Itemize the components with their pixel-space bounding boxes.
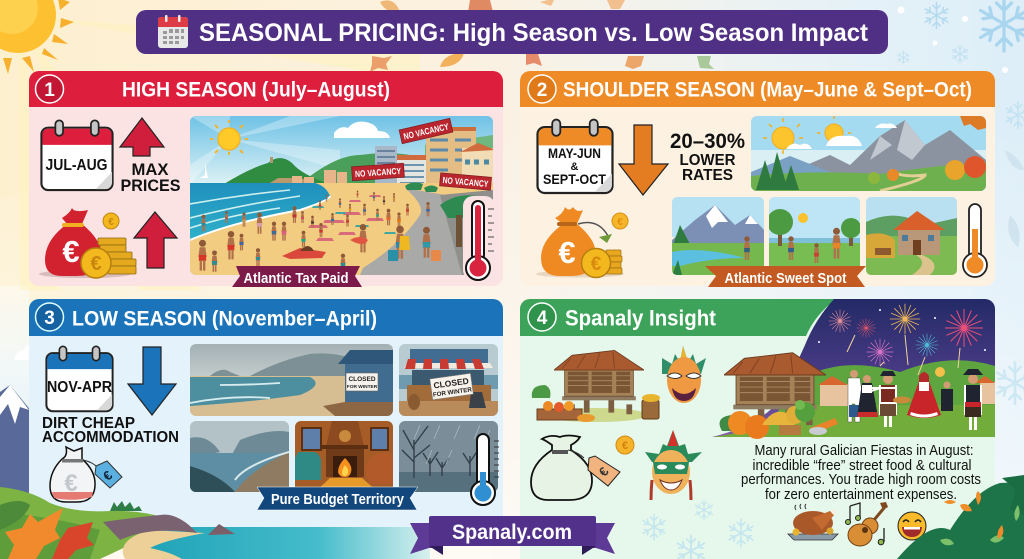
illustration: crowded beach bbox=[190, 116, 496, 275]
text block: insight: performances. You trade high room costs bbox=[741, 472, 981, 488]
calendar: JUL-AUG: JUL-AUG bbox=[46, 157, 108, 174]
panel 4 header: 4 bbox=[537, 308, 548, 329]
sign: no vacancy 1: NO VACANCY bbox=[403, 121, 450, 142]
calendar: May-Jun & Sept-Oct bbox=[538, 120, 612, 193]
illustration: festival horreo bbox=[724, 353, 826, 425]
panel 4 header: Spanaly Insight bbox=[565, 306, 717, 330]
calendar: NOV-APR: NOV-APR bbox=[47, 379, 112, 396]
illustration: misty coast bbox=[190, 421, 289, 492]
illustration: country house bbox=[866, 197, 957, 275]
icon: empty money bag with tag bbox=[50, 447, 122, 502]
icon: green carnival mask bbox=[645, 430, 702, 500]
foreground coast: hill, rocks, sand bbox=[0, 487, 235, 559]
sign: closed for winter stall: FOR WINTER bbox=[433, 386, 473, 399]
label: dirt cheap accommodation: ACCOMMODATION bbox=[42, 429, 179, 446]
icon: red money bag with coins: € bbox=[108, 217, 114, 228]
label: max prices bbox=[120, 160, 180, 195]
arrow down: blue bbox=[128, 347, 176, 415]
label: max prices: MAX bbox=[132, 160, 169, 179]
logo ribbon: Spanaly.com: Spanaly.com bbox=[452, 521, 572, 544]
icon: orange money bag: € bbox=[558, 235, 576, 270]
sign: closed for winter bbox=[346, 373, 378, 391]
sign: closed for winter: FOR WINTER bbox=[347, 384, 378, 390]
banner: Pure Budget Territory: Pure Budget Territory bbox=[271, 491, 405, 508]
icon: red money bag with coins: € bbox=[90, 253, 102, 275]
illustration: fireworks night sky and festival bbox=[712, 299, 995, 437]
calendar: May-Jun & Sept-Oct: & bbox=[571, 161, 579, 173]
panel 1 header bbox=[29, 71, 503, 107]
icon: orange money bag bbox=[536, 207, 628, 278]
foliage bottom-right bbox=[897, 475, 1024, 559]
text block: insight: incredible “free” street food & cultural bbox=[752, 458, 972, 474]
bottom-left mountain and sea bbox=[0, 385, 430, 559]
autumn leaves around title bbox=[370, 0, 714, 72]
icon: guitar and music notes bbox=[846, 502, 888, 546]
snowflakes panel 4 bbox=[643, 500, 753, 559]
sign: no vacancy 3: NO VACANCY bbox=[442, 175, 489, 189]
panel 2: shoulder season bbox=[520, 71, 995, 287]
label: dirt cheap accommodation: DIRT CHEAP bbox=[42, 415, 135, 432]
panel 3 header: LOW SEASON (November–April) bbox=[72, 306, 377, 330]
panel 4 header bbox=[520, 299, 836, 336]
banner: Atlantic Sweet Spot: Atlantic Sweet Spot bbox=[724, 270, 846, 287]
icon: gold coin: € bbox=[622, 440, 628, 452]
illustration: horreo with vegetables bbox=[532, 350, 660, 422]
panel 4: Spanaly insight bbox=[520, 299, 1024, 559]
illustration: family on meadow bbox=[769, 197, 860, 266]
illustration: fireplace room bbox=[295, 421, 393, 492]
fireworks bbox=[818, 304, 986, 375]
arrow down bbox=[619, 125, 668, 195]
title bar bbox=[136, 10, 888, 54]
panel 3: low season bbox=[29, 299, 503, 527]
label: max prices: PRICES bbox=[120, 176, 180, 195]
label: lower rates bbox=[670, 130, 745, 184]
panel 1 header: 1 bbox=[44, 80, 55, 101]
icon: roast turkey bbox=[788, 504, 838, 540]
text block: insight: for zero entertainment expenses. bbox=[765, 487, 957, 503]
panel 2 header: SHOULDER SEASON (May–June & Sept–Oct) bbox=[563, 78, 972, 102]
logo ribbon: Spanaly.com bbox=[410, 516, 615, 555]
icon: red money bag with coins bbox=[39, 208, 136, 278]
illustration: mountains and autumn valley bbox=[751, 116, 986, 191]
icon: carnival mask bbox=[662, 346, 706, 403]
sun top-left bbox=[0, 0, 420, 290]
panel 1 header: HIGH SEASON (July–August) bbox=[122, 78, 390, 102]
calendar: NOV-APR bbox=[46, 346, 113, 411]
calendar: May-Jun & Sept-Oct: MAY-JUN bbox=[548, 145, 601, 161]
snowflakes top-right bbox=[898, 0, 1024, 404]
illustration: river hiking bbox=[672, 197, 764, 275]
panel 2 header bbox=[520, 71, 995, 107]
label: dirt cheap accommodation bbox=[42, 415, 179, 446]
illustration: rainy beach with closed hut bbox=[190, 344, 395, 416]
festival dancers bbox=[848, 367, 983, 430]
icon: empty green money bag with tag bbox=[531, 436, 620, 500]
sign: closed for winter: CLOSED bbox=[348, 376, 376, 383]
icon: empty green money bag with tag: € bbox=[596, 464, 612, 479]
beach sun bbox=[210, 120, 248, 155]
icon: orange money bag: € bbox=[617, 217, 623, 228]
text block: insight: Many rural Galician Fiestas in August: bbox=[754, 443, 974, 459]
sign: no vacancy 3 bbox=[440, 173, 492, 190]
title text: SEASONAL PRICING: High Season vs. Low Season Impact bbox=[199, 19, 869, 47]
banner: Atlantic Tax Paid: Atlantic Tax Paid bbox=[244, 270, 348, 287]
label: lower rates: 20–30% bbox=[670, 130, 745, 153]
icon: calendar bbox=[158, 15, 188, 48]
banner: Pure Budget Territory bbox=[257, 487, 418, 510]
icon: orange money bag: € bbox=[591, 254, 602, 275]
icon: empty money bag with tag: € bbox=[64, 470, 78, 497]
icon: empty money bag with tag: € bbox=[100, 468, 115, 484]
calendar: JUL-AUG bbox=[41, 120, 113, 190]
panel 3 header bbox=[29, 299, 503, 336]
sign: no vacancy 2: NO VACANCY bbox=[355, 166, 401, 179]
panel 1: high season bbox=[29, 71, 503, 287]
thermometer: hot bbox=[463, 196, 495, 280]
illustration: closed beach stall bbox=[399, 344, 498, 416]
sign: closed for winter stall: CLOSED bbox=[433, 376, 469, 391]
label: lower rates: RATES bbox=[682, 167, 733, 184]
icon: gold coin bbox=[616, 436, 634, 454]
thermometer: mild bbox=[963, 204, 987, 277]
foreground autumn leaves bottom-left bbox=[0, 501, 94, 559]
arrow up: max prices bbox=[120, 118, 164, 156]
sign: no vacancy 2 bbox=[352, 163, 404, 181]
panel 2 header: 2 bbox=[537, 80, 547, 101]
label: lower rates: LOWER bbox=[680, 152, 736, 169]
illustration: rainy trees bbox=[399, 421, 498, 492]
thermometer: cold bbox=[471, 434, 499, 505]
arrow up: bag bbox=[134, 212, 177, 268]
text block: insight bbox=[741, 443, 981, 503]
icon: smiling face bbox=[898, 512, 926, 540]
calendar: May-Jun & Sept-Oct: SEPT-OCT bbox=[543, 171, 606, 187]
icon: red money bag with coins: € bbox=[62, 234, 80, 269]
illustration: harvest vegetables bbox=[720, 400, 838, 439]
sign: closed for winter stall bbox=[430, 373, 473, 400]
panel 3 header: 3 bbox=[44, 308, 55, 329]
